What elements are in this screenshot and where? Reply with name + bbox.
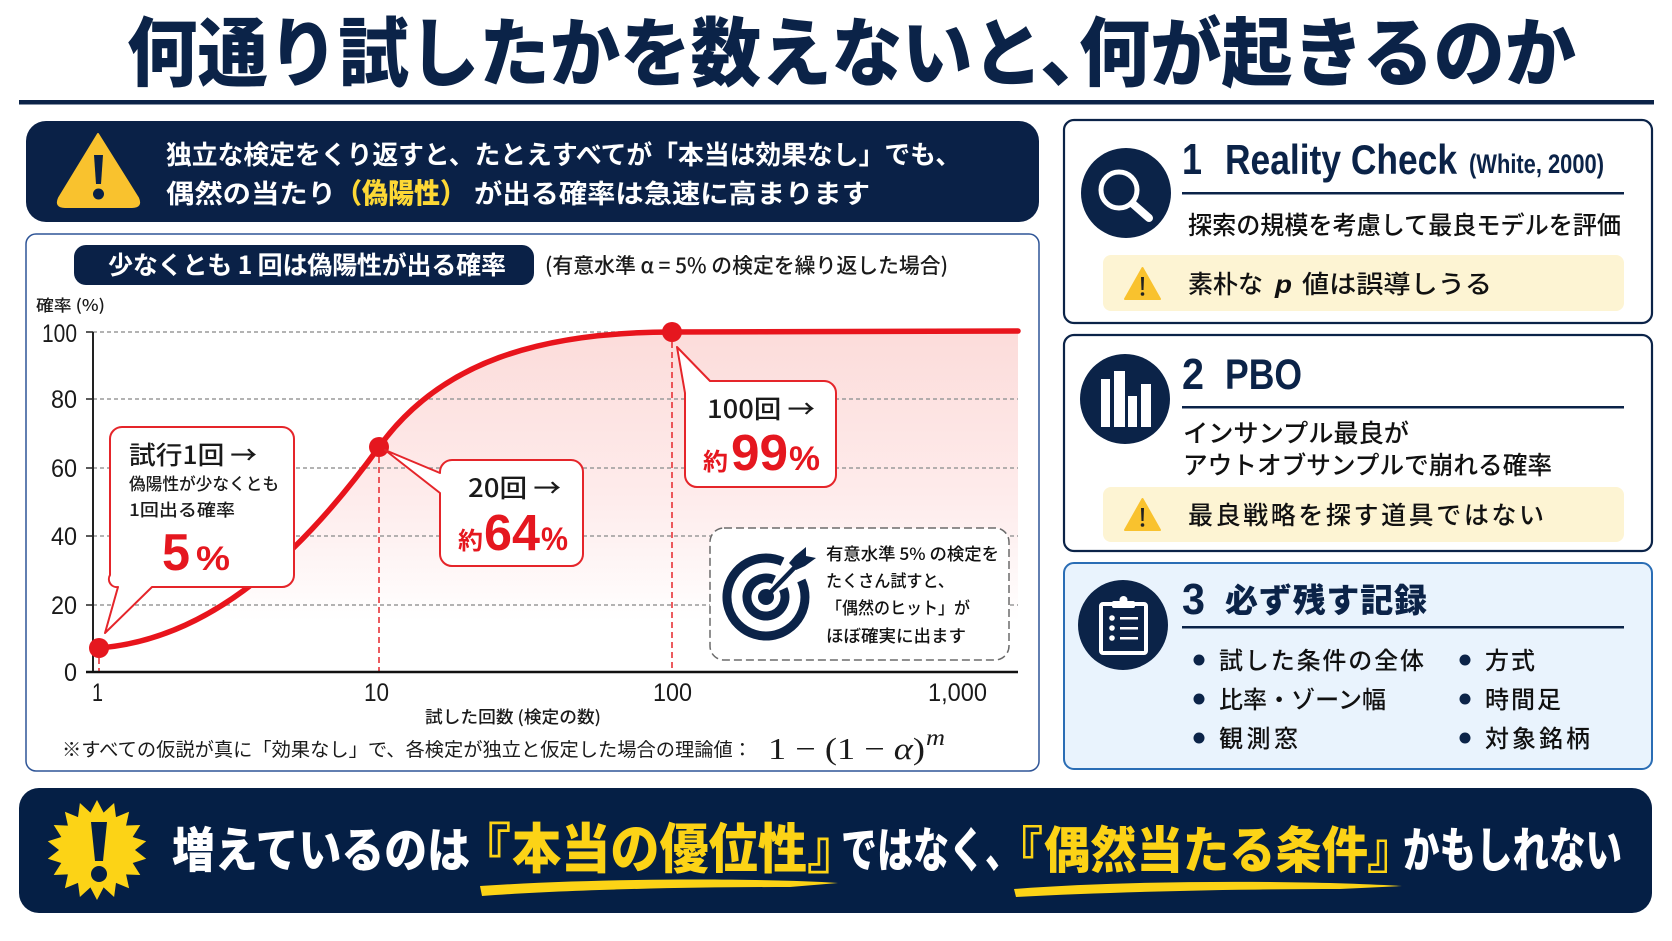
- note: target box: ほぼ確実に出ます: [826, 622, 966, 647]
- callout: 100 trials: 約: [703, 442, 728, 477]
- caution note: [1103, 487, 1624, 542]
- formula: m: [926, 725, 945, 750]
- icon: clipboard: [1078, 580, 1168, 670]
- panel: 3 records: [1064, 563, 1652, 769]
- caution note: 最良戦略を探す道具ではない: [1188, 496, 1544, 532]
- y axis labels: 0: [64, 659, 77, 687]
- takeaway text: 本当の優位性: [512, 805, 807, 884]
- x axis labels: 1: [92, 679, 103, 707]
- callout: 1 trial: %: [196, 540, 230, 578]
- callout: 100 trials: 99: [731, 424, 788, 481]
- body text: インサンプル最良が: [1183, 414, 1409, 450]
- banner text line 1: 独立な検定をくり返すと、たとえすべてが「本当は効果なし」でも、: [166, 135, 961, 172]
- heading: 1: [1182, 135, 1202, 184]
- title: [19, 0, 1654, 104]
- heading: [1182, 135, 1604, 184]
- caution note: 素朴な: [1188, 265, 1263, 301]
- callout: 1 trial: 試行1回 →: [129, 436, 257, 472]
- panel: 1 Reality Check: [1064, 120, 1652, 323]
- icon: bar chart: [1080, 354, 1170, 444]
- chart subtitle: (有意水準 α = 5% の検定を繰り返した場合): [545, 250, 948, 280]
- banner text line 2: 偶然の当たり: [166, 174, 336, 211]
- callout: 20 trials: %: [541, 521, 568, 557]
- x axis title: 試した回数 (検定の数): [425, 703, 601, 728]
- heading: 3: [1182, 575, 1205, 624]
- callout: 1 trial: 偽陽性が少なくとも: [129, 470, 279, 495]
- bottom takeaway banner: [19, 788, 1652, 913]
- callout: 1 trial: [105, 427, 294, 633]
- icon: yellow burst with exclamation mark: [48, 800, 146, 900]
- callout: 1 trial: 5: [162, 524, 190, 582]
- heading: 2: [1182, 350, 1204, 399]
- callout: 20 trials: 20回 →: [468, 469, 561, 505]
- record list: 方式: [1485, 641, 1535, 676]
- record list: 時間足: [1485, 680, 1561, 715]
- caution note: 値は誤導しうる: [1302, 265, 1492, 301]
- callout: 20 trials: [385, 450, 583, 566]
- heading: [1182, 350, 1302, 399]
- heading: 必ず残す記録: [1225, 574, 1427, 622]
- takeaway text: 増えているのは: [172, 811, 470, 881]
- heading: Reality Check: [1225, 136, 1458, 183]
- takeaway text: 『: [457, 805, 511, 884]
- x axis labels: 1,000: [928, 679, 987, 707]
- callout: 20 trials: 64: [484, 504, 541, 561]
- y axis title: 確率 (%): [36, 292, 105, 316]
- panel: 2 PBO: [1064, 335, 1652, 551]
- footnote: ※すべての仮説が真に「効果なし」で、各検定が独立と仮定した場合の理論値：: [62, 735, 752, 762]
- heading: PBO: [1225, 351, 1302, 399]
- callout: 1 trial: 1回出る確率: [129, 496, 235, 521]
- body text: アウトオブサンプルで崩れる確率: [1183, 446, 1552, 482]
- callout: 100 trials: %: [789, 440, 820, 478]
- takeaway text: 偶然当たる条件: [1044, 811, 1368, 883]
- record list: 対象銘柄: [1485, 719, 1590, 754]
- takeaway text: ではなく、: [841, 811, 1021, 881]
- y axis labels: 60: [51, 455, 77, 483]
- record list: 試した条件の全体: [1219, 641, 1424, 676]
- icon: magnifier: [1081, 148, 1171, 238]
- underline strokes: [480, 880, 838, 896]
- note: target box: 「偶然のヒット」が: [826, 594, 970, 619]
- heading: (White, 2000): [1469, 149, 1604, 179]
- note: target box: 有意水準 5% の検定を: [826, 540, 999, 565]
- caution note: [1103, 255, 1624, 311]
- icon: target with arrow: [727, 547, 816, 636]
- chart heading pill: 少なくとも 1 回は偽陽性が出る確率: [108, 246, 506, 282]
- banner text line 2: が出る確率は急速に高まります: [474, 174, 870, 211]
- banner text line 2: （偽陽性）: [336, 172, 466, 212]
- x axis labels: 100: [653, 679, 692, 707]
- record list: [1194, 641, 1590, 754]
- formula: 1 − (1 − α): [768, 731, 925, 766]
- body text: 探索の規模を考慮して最良モデルを評価: [1188, 206, 1621, 242]
- x axis labels: [92, 679, 987, 707]
- y axis labels: 80: [51, 386, 77, 414]
- note: target box: たくさん試すと、: [826, 567, 954, 592]
- icon: warning triangle: [58, 134, 139, 207]
- takeaway text: 』: [1367, 811, 1417, 883]
- callout: 100 trials: [677, 347, 836, 487]
- note: target box: [710, 528, 1009, 660]
- y axis labels: 100: [42, 320, 77, 348]
- x axis labels: 10: [364, 679, 389, 707]
- record list: 観測窓: [1219, 719, 1298, 754]
- takeaway text: 『: [993, 811, 1043, 883]
- line chart: [86, 322, 1018, 672]
- body text: [1183, 414, 1552, 482]
- caution note: p: [1274, 271, 1292, 299]
- y axis labels: 20: [51, 592, 77, 620]
- takeaway text: 』: [807, 805, 861, 884]
- y axis labels: [42, 320, 77, 687]
- callout: 100 trials: 100回 →: [707, 390, 815, 426]
- callout: 20 trials: 約: [458, 521, 483, 556]
- y axis labels: 40: [51, 523, 77, 551]
- warning banner: [26, 121, 1039, 222]
- takeaway text: [172, 805, 1622, 884]
- panel: chart: [26, 234, 1039, 771]
- record list: 比率・ゾーン幅: [1219, 680, 1386, 715]
